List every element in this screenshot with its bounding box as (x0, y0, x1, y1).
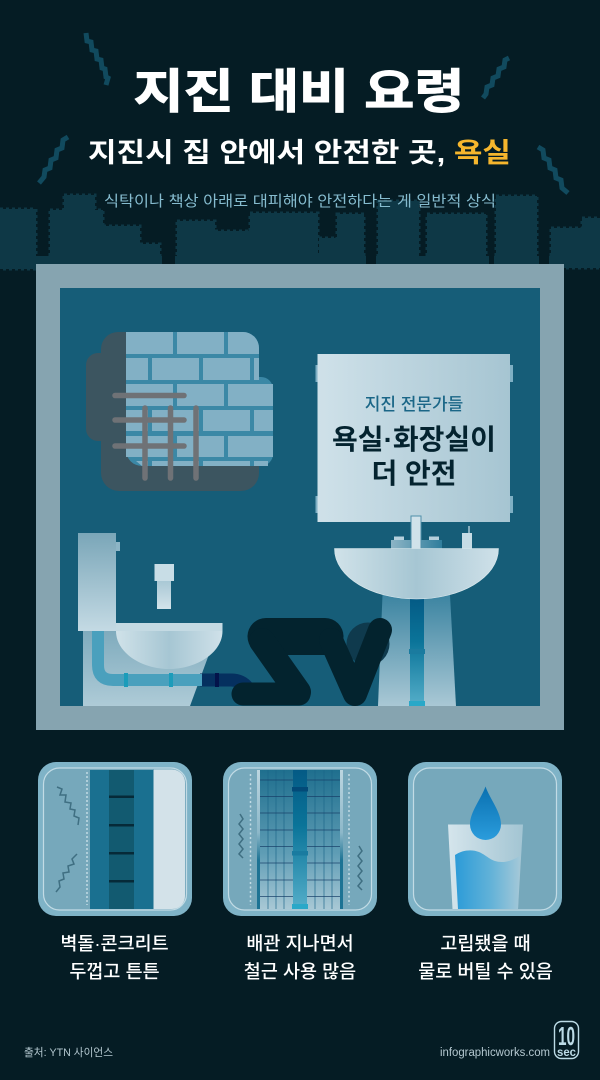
background: cracked ground silhouettes (0, 195, 600, 270)
toilet (78, 533, 248, 706)
card caption: brick and concrete: 두껍고 튼튼 (69, 961, 160, 982)
card: brick and concrete (38, 762, 192, 916)
central pipe (293, 770, 307, 909)
dashed line (86, 772, 88, 905)
water drop (470, 786, 501, 840)
head (346, 622, 390, 666)
torso (266, 618, 325, 655)
glass (448, 824, 523, 909)
card caption: brick and concrete: 벽돌·콘크리트 (60, 933, 169, 954)
card caption: water: 물로 버틸 수 있음 (418, 961, 553, 982)
drain joint (215, 673, 219, 687)
card caption: plumbing: 배관 지나면서 (246, 933, 354, 954)
pipe joints (124, 673, 173, 687)
card inner (414, 768, 556, 910)
faucet (411, 516, 421, 549)
logo: 10 sec: sec (557, 1045, 576, 1059)
mirror clips (316, 365, 513, 513)
pedestal pipe (410, 598, 424, 706)
source: 출처: YTN 사이언스 (24, 1046, 113, 1059)
toilet seat (116, 623, 222, 631)
logo: 10 sec: 10 (558, 1021, 575, 1051)
card caption: water: 고립됐을 때 (440, 933, 531, 954)
card caption: plumbing (244, 933, 356, 982)
arm (331, 630, 380, 694)
bricks (126, 332, 273, 466)
card inner (228, 768, 372, 910)
card caption: plumbing: 철근 사용 많음 (244, 961, 356, 982)
card caption: brick and concrete (60, 933, 169, 982)
vibration lines (239, 814, 362, 890)
card: water (408, 762, 562, 916)
brick backing (126, 332, 273, 466)
person crouching (243, 622, 390, 694)
water pipe (98, 631, 202, 680)
grid fill (260, 770, 340, 909)
faucet knobs (394, 536, 439, 540)
pedestal (378, 595, 456, 706)
card frame (38, 762, 192, 916)
flush handle (116, 542, 120, 551)
toilet paper holder (154, 564, 174, 581)
mirror headline: 욕실·화장실이 (332, 424, 496, 455)
card frame (223, 762, 377, 916)
concrete core (109, 770, 134, 909)
mirror panel (318, 354, 510, 522)
logo: 10 sec (554, 1021, 578, 1059)
dark drain pipe (200, 680, 248, 688)
pipe joint (409, 649, 425, 654)
zigzag crack accents (39, 33, 568, 193)
title: 지진 대비 요령 (134, 65, 464, 118)
white wall (154, 770, 185, 909)
card inner (44, 768, 186, 910)
dashed lines (250, 774, 349, 905)
toilet tank (78, 533, 116, 631)
pipe foot (409, 701, 425, 706)
panel: bathroom scene (48, 276, 552, 718)
rebar grid (260, 770, 340, 909)
thigh (262, 641, 298, 692)
lower leg (243, 682, 299, 706)
mirror label: 지진 전문가들 (365, 395, 463, 414)
wall section (90, 770, 153, 909)
subtitle: 지진시 집 안에서 안전한 곳, 욕실 (88, 138, 511, 168)
intro line: 식탁이나 책상 아래로 대피해야 안전하다는 게 일반적 상식 (104, 193, 496, 210)
toilet bowl (116, 631, 222, 669)
sink (334, 516, 498, 706)
wall edges (257, 770, 343, 909)
mirror headline line two: 더 안전 (371, 458, 457, 489)
card frame (408, 762, 562, 916)
cracks (56, 787, 79, 892)
toilet paper (157, 581, 171, 609)
website: infographicworks.com (440, 1047, 550, 1059)
toilet base (83, 631, 208, 706)
mirror with message (316, 354, 513, 522)
sink basin (334, 548, 498, 599)
rebar (115, 396, 196, 478)
water (455, 850, 520, 909)
dark gaps between ground blocks (162, 240, 549, 270)
wall shadow (86, 332, 259, 491)
brick seams (109, 796, 134, 882)
card: plumbing (223, 762, 377, 916)
card caption: water (418, 933, 553, 982)
cup and toothbrush (462, 526, 472, 549)
faucet base (391, 540, 442, 549)
pipe joints (292, 787, 308, 909)
illustration: damaged brick wall with rebar (86, 332, 273, 491)
room frame (48, 276, 552, 718)
